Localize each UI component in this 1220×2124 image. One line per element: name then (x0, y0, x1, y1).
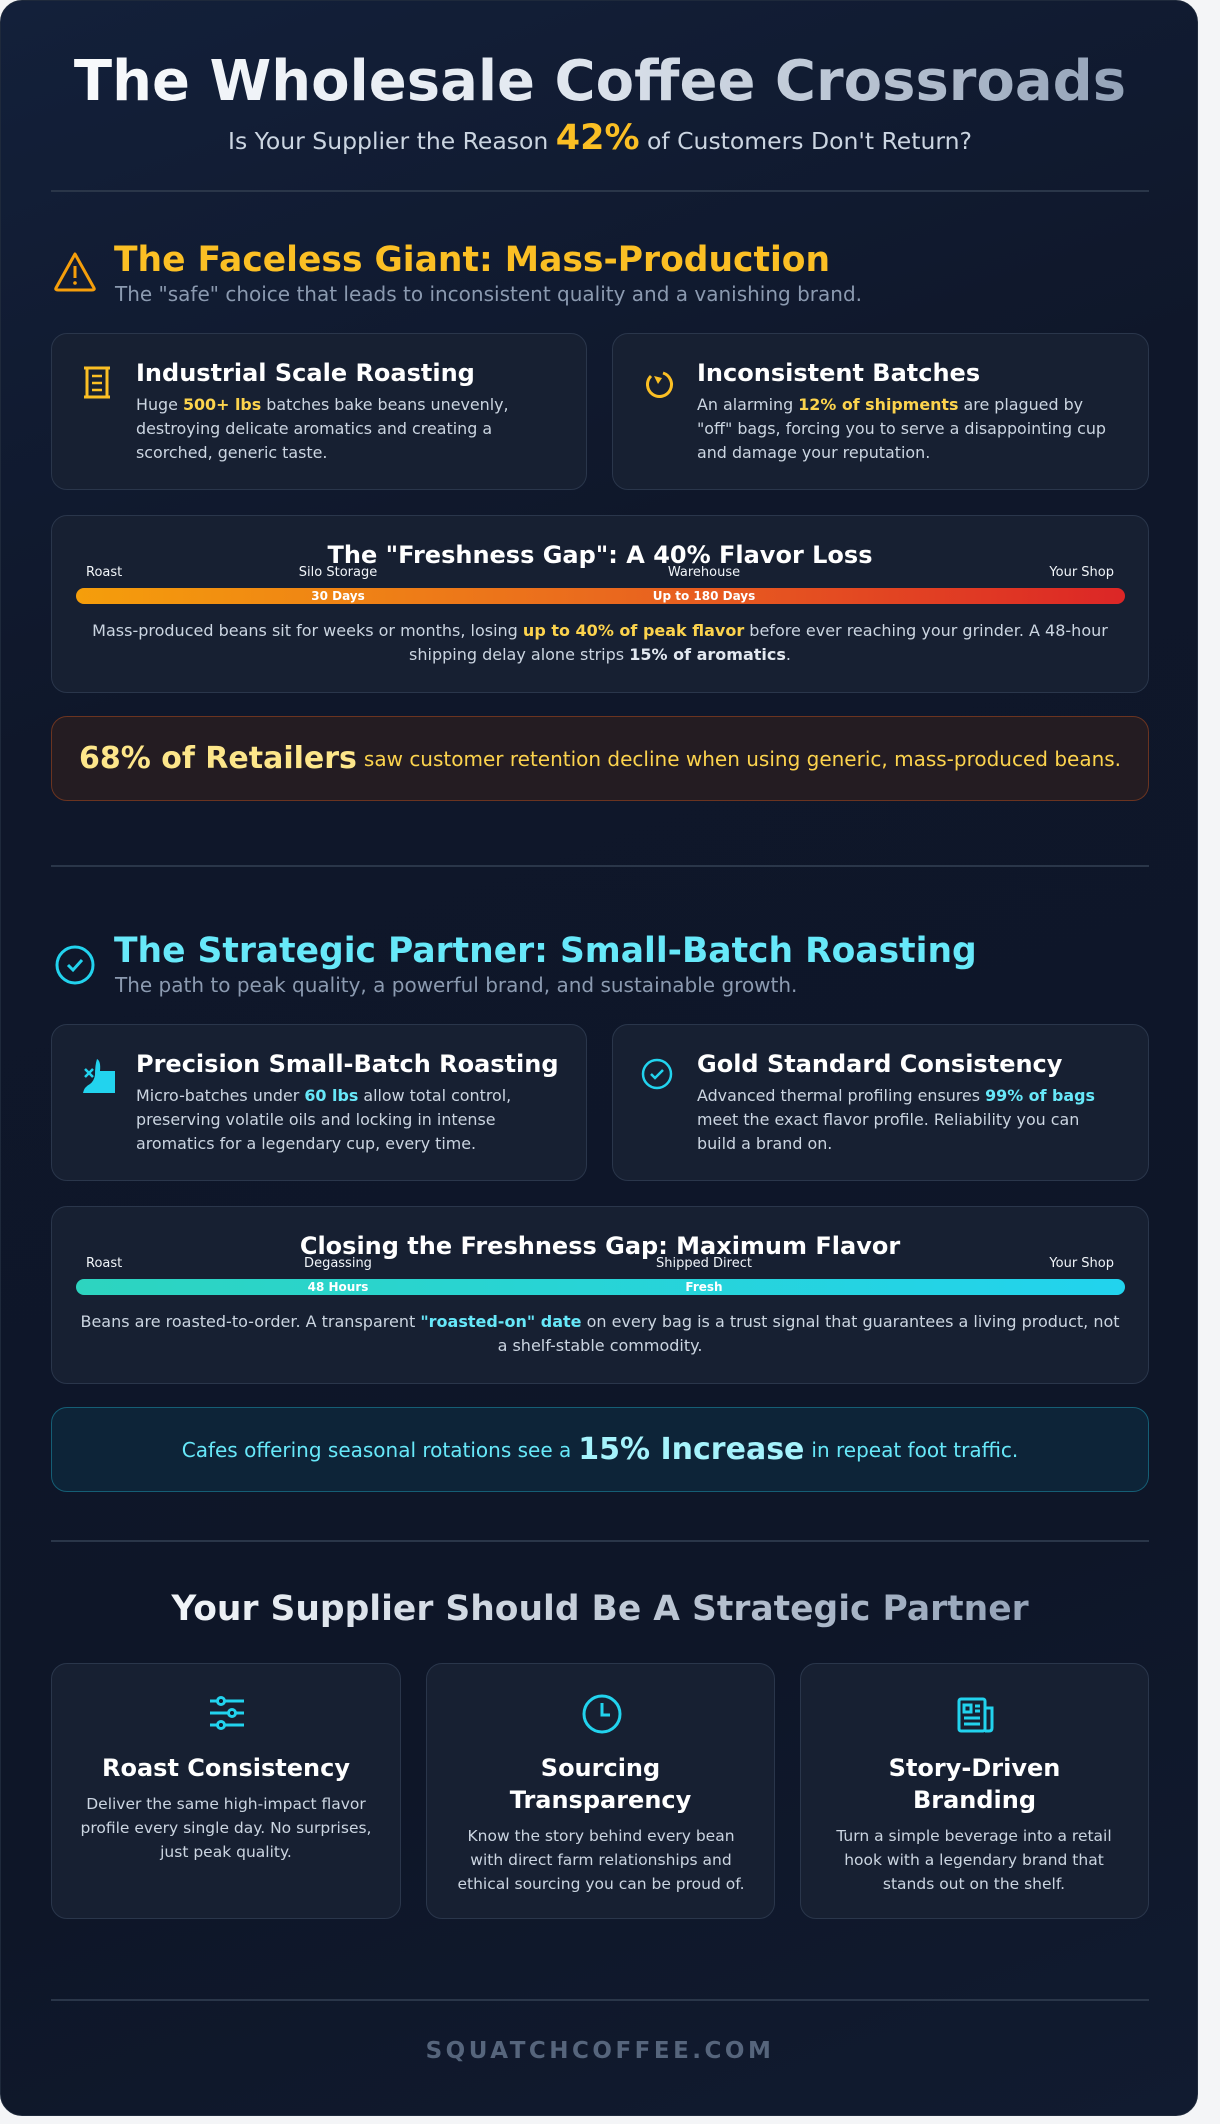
heading: supplier partner: Your Supplier Should Be A Strategic Partner (171, 1589, 1029, 1629)
timeline labels: Warehouse (668, 565, 740, 580)
footer: SQUATCHCOFFEE.COM (426, 2038, 774, 2064)
card body: Huge 500+ lbs batches bake beans unevenly, (136, 395, 509, 414)
chart description: Mass-produced beans sit for weeks or months, losing up to 40% of peak flavor before ever reaching your grinder. A 48-hour (92, 621, 1108, 640)
timeline labels (86, 565, 1114, 580)
title: The Wholesale Coffee Crossroads (74, 49, 1126, 114)
chart title: The "Freshness Gap": A 40% Flavor Loss (328, 541, 872, 569)
timeline labels: Shipped Direct (656, 1256, 752, 1271)
timeline labels (86, 1256, 1114, 1271)
icon: building (84, 366, 110, 398)
card body: Turn a simple beverage into a retail (836, 1827, 1112, 1845)
heading: strategic partner: The Strategic Partner: Small-Batch Roasting (114, 931, 977, 971)
icon: sliders (210, 1696, 244, 1730)
card body (136, 395, 509, 462)
card title: Sourcing (541, 1754, 660, 1782)
callout: 68% retailers: saw customer retention decline when using generic, mass-produced beans. (364, 746, 1121, 770)
card body: and damage your reputation. (697, 443, 930, 462)
bar: fresh: Fresh (685, 1280, 723, 1294)
panel: freshness gap chart (51, 515, 1149, 693)
callout: 68% retailers: 68% of Retailers (79, 741, 357, 776)
panel: story-driven branding (800, 1663, 1149, 1919)
chart title: Closing the Freshness Gap: Maximum Flavor (300, 1232, 900, 1260)
card title: Branding (913, 1786, 1036, 1814)
bar: freshness gap: Up to 180 Days (653, 589, 755, 603)
panel: closing freshness gap (51, 1206, 1149, 1384)
callout: 15% increase: Cafes offering seasonal rotations see a in repeat foot traffic. (182, 1438, 1018, 1462)
card body: hook with a legendary brand that (844, 1851, 1104, 1869)
card title: Gold Standard Consistency (697, 1050, 1062, 1078)
card body: Advanced thermal profiling ensures 99% of bags (697, 1086, 1095, 1105)
timeline labels: Silo Storage (299, 565, 377, 580)
card title (510, 1754, 691, 1814)
icon: check (642, 1058, 672, 1090)
card body (697, 1086, 1095, 1153)
icon: timer (646, 372, 674, 398)
panel: sourcing transparency (426, 1663, 775, 1919)
card body: An alarming 12% of shipments are plagued by (697, 395, 1083, 414)
bar: fresh (76, 1279, 1125, 1295)
heading: faceless giant: The Faceless Giant: Mass-Production (114, 240, 830, 280)
icon: hand (83, 1059, 115, 1093)
chart description: a shelf-stable commodity. (498, 1336, 702, 1355)
callout: 15% increase (51, 1407, 1149, 1492)
panel: gold standard (612, 1024, 1149, 1181)
timeline labels: Your Shop (1049, 1256, 1114, 1271)
panel: roast consistency (51, 1663, 401, 1919)
timeline labels: Roast (86, 1256, 122, 1271)
chart description (92, 621, 1108, 664)
card title: Roast Consistency (102, 1754, 350, 1782)
card body: "off" bags, forcing you to serve a disappointing cup (697, 419, 1106, 438)
timeline labels: Your Shop (1049, 565, 1114, 580)
icon: warning (54, 252, 96, 292)
bar: freshness gap (76, 588, 1125, 604)
callout: 68% retailers (51, 716, 1149, 801)
card body: meet the exact flavor profile. Reliability you can (697, 1110, 1079, 1129)
bar: fresh: 48 Hours (308, 1280, 368, 1294)
icon: check circle (56, 946, 94, 984)
card body: Micro-batches under 60 lbs allow total control, (136, 1086, 511, 1105)
card body: stands out on the shelf. (883, 1875, 1065, 1893)
card title (889, 1754, 1060, 1814)
card body: with direct farm relationships and (470, 1851, 732, 1869)
card body: Know the story behind every bean (467, 1827, 735, 1845)
card body: scorched, generic taste. (136, 443, 327, 462)
panel: inconsistent batches (612, 333, 1149, 490)
chart description: Beans are roasted-to-order. A transparent "roasted-on" date on every bag is a trust signal that guarantees a living product, not (80, 1312, 1120, 1331)
timeline labels: Degassing (304, 1256, 372, 1271)
card body: destroying delicate aromatics and creating a (136, 419, 492, 438)
bar: freshness gap: 30 Days (311, 589, 365, 603)
card body: ethical sourcing you can be proud of. (458, 1875, 744, 1893)
timeline labels: Roast (86, 565, 122, 580)
card body: build a brand on. (697, 1134, 832, 1153)
subheading: The path to peak quality, a powerful brand, and sustainable growth. (115, 973, 797, 997)
card body: preserving volatile oils and locking in intense (136, 1110, 496, 1129)
card body: Deliver the same high-impact flavor profile every single day. No surprises, just peak quality. (80, 1795, 371, 1861)
card body (836, 1827, 1112, 1893)
card body: aromatics for a legendary cup, every time. (136, 1134, 476, 1153)
callout: 15% increase: 15% Increase (578, 1432, 804, 1467)
subheading: The "safe" choice that leads to inconsistent quality and a vanishing brand. (115, 282, 862, 306)
panel: precision small batch (51, 1024, 587, 1181)
card title: Story-Driven (889, 1754, 1060, 1782)
chart description: shipping delay alone strips 15% of aromatics. (409, 645, 791, 664)
card body (458, 1827, 744, 1893)
card title: Inconsistent Batches (697, 359, 980, 387)
card title: Precision Small-Batch Roasting (136, 1050, 559, 1078)
icon: clock (582, 1694, 622, 1734)
card title: Transparency (510, 1786, 691, 1814)
card title: Industrial Scale Roasting (136, 359, 475, 387)
card body (136, 1086, 511, 1153)
subtitle: Is Your Supplier the Reason 42% of Customers Don't Return? (228, 118, 972, 158)
card body (697, 395, 1106, 462)
icon: newspaper (958, 1698, 994, 1732)
chart description (80, 1312, 1120, 1355)
panel: industrial scale roasting (51, 333, 587, 490)
